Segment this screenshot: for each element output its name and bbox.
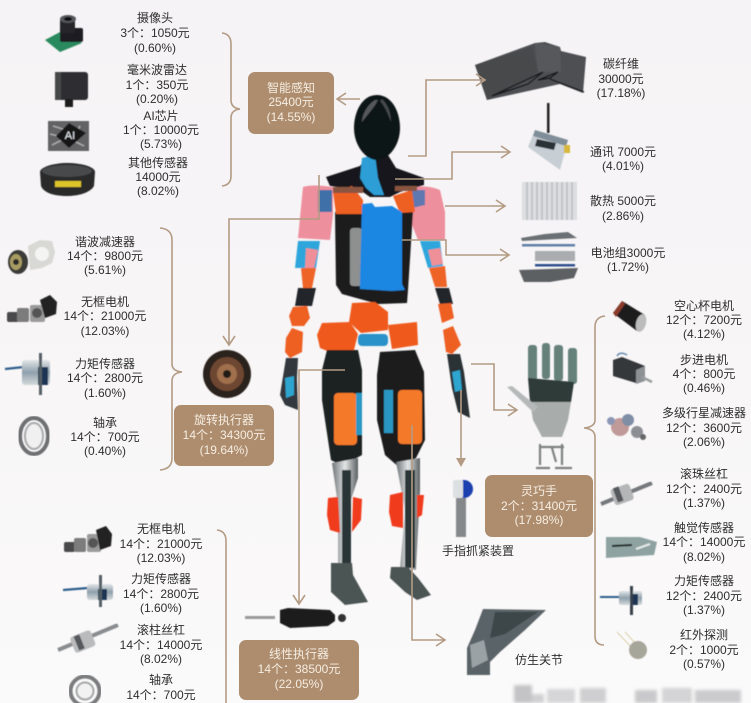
label: linear torque sensor: (1.60%)	[140, 601, 182, 615]
icon: camera	[45, 15, 83, 52]
label: bearing: (0.40%)	[84, 444, 126, 458]
icon: finger grip	[453, 480, 473, 537]
label: roller screw: 滚柱丝杠	[137, 622, 185, 637]
label: coreless motor: 空心杯电机	[674, 299, 734, 313]
label: bearing: 14个：700元	[70, 430, 140, 444]
icon: hand torque sensor	[600, 586, 642, 615]
icon: bearing	[20, 418, 48, 454]
icon: harmonic reducer	[8, 240, 55, 274]
label: mm-wave radar: 1个：350元	[126, 78, 188, 92]
arrow: to rotary actuator	[223, 175, 319, 345]
label: harmonic reducer: (5.61%)	[84, 263, 126, 277]
label: linear frameless motor: 无框电机	[137, 522, 185, 536]
left shin	[332, 458, 358, 565]
label: AI chip: (5.73%)	[140, 137, 182, 151]
icon: stepper motor	[613, 353, 652, 384]
icon: heat sink	[522, 182, 577, 220]
icon: linear torque sensor	[63, 575, 113, 607]
icon: frameless motor	[7, 295, 57, 322]
icon: roller screw	[58, 625, 118, 654]
label: bionic joint: 仿生关节	[515, 653, 563, 667]
panel: linear actuator: 14个：38500元	[258, 662, 340, 676]
label: roller screw: (8.02%)	[140, 652, 182, 666]
label: frameless motor: (12.03%)	[81, 324, 129, 338]
label: bearing: 轴承	[93, 415, 117, 430]
right thigh	[377, 350, 425, 468]
label: frameless motor: 无框电机	[81, 295, 129, 309]
label: coreless motor: (4.12%)	[683, 327, 725, 341]
label: carbon fibre: (17.18%)	[597, 86, 645, 100]
panel: perception: (14.55%)	[267, 110, 315, 124]
icon: dexterous hand	[507, 343, 577, 468]
label: battery: (1.72%)	[607, 260, 649, 274]
panel: dexterous hand	[485, 475, 593, 537]
label: coreless motor: 12个：7200元	[666, 313, 742, 327]
label: hand torque sensor: (1.37%)	[683, 603, 725, 617]
label: mm-wave radar: 毫米波雷达	[127, 62, 187, 77]
label: harmonic reducer: 14个：9800元	[67, 249, 143, 263]
icon: bionic joint	[467, 609, 546, 675]
label: hand torque sensor: 12个：2400元	[666, 589, 742, 603]
head	[354, 95, 400, 160]
label: camera: (0.60%)	[134, 41, 176, 55]
label: infrared sensor: 红外探测	[680, 627, 728, 642]
icon: rotary actuator	[203, 350, 251, 398]
label: linear frameless motor: (12.03%)	[137, 551, 185, 565]
label: ball screw: (1.37%)	[683, 496, 725, 510]
brace: linear actuator parts	[217, 530, 226, 703]
label: linear torque sensor: 力矩传感器	[131, 571, 191, 586]
label: torque sensor: 14个：2800元	[67, 371, 143, 385]
icon: radar	[55, 72, 88, 107]
icon: linear frameless motor	[64, 526, 112, 552]
panel: dexterous hand: (17.98%)	[515, 513, 563, 527]
icon: communications module	[528, 103, 570, 170]
panel: perception: 25400元	[268, 95, 314, 109]
arrow: to finger grip	[456, 390, 466, 467]
label: camera: 摄像头	[137, 10, 173, 25]
arrow: to carbon fibre	[408, 74, 485, 156]
brace: perception parts	[222, 33, 240, 186]
shoulders	[326, 155, 424, 197]
panel: linear actuator: 线性执行器	[269, 647, 329, 661]
label: tactile sensor: 触觉传感器	[674, 520, 734, 535]
robot figure	[280, 95, 470, 605]
left thigh	[322, 350, 362, 466]
label: planetary reducer: 多级行星减速器	[662, 406, 746, 420]
label: other sensors: 其他传感器	[128, 155, 188, 170]
hip right	[388, 322, 418, 349]
label: linear bearing: 轴承	[149, 672, 173, 687]
label: torque sensor: 力矩传感器	[75, 356, 135, 371]
label: torque sensor: (1.60%)	[84, 386, 126, 400]
panel: perception	[248, 72, 334, 134]
panel: rotary actuator: 14个：34300元	[183, 428, 265, 442]
label: ball screw: 滚珠丝杠	[680, 466, 728, 481]
arrow: to battery	[402, 240, 509, 261]
brace: rotary actuator parts	[160, 228, 182, 470]
label: harmonic reducer: 谐波减速器	[75, 235, 135, 249]
label: stepper motor: 步进电机	[680, 353, 728, 367]
icon: carbon fibre sheets	[475, 42, 586, 100]
icon: torque sensor	[5, 353, 50, 395]
label: linear frameless motor: 14个：21000元	[120, 537, 202, 551]
label: communications: 通讯 7000元	[590, 145, 656, 159]
label: stepper motor: 4个：800元	[673, 367, 735, 381]
label: other sensors: 14000元	[135, 170, 181, 184]
chest actuators	[333, 186, 363, 214]
panel: rotary actuator: (19.64%)	[200, 443, 248, 457]
label: finger grip: 手指抓紧装置	[442, 543, 514, 558]
label: infrared sensor: (0.57%)	[683, 657, 725, 671]
label: linear torque sensor: 14个：2800元	[123, 587, 199, 601]
label: tactile sensor: (8.02%)	[683, 550, 725, 564]
arrow: to bionic joint	[412, 425, 445, 646]
label: cooling: (2.86%)	[602, 209, 644, 223]
brace: dexterous hand parts	[584, 316, 605, 645]
icon: AI chip	[48, 121, 89, 151]
panel: rotary actuator	[174, 405, 274, 466]
arrow: head to perception	[337, 93, 360, 105]
label: stepper motor: (0.46%)	[683, 381, 725, 395]
label: AI chip: AI芯片	[143, 109, 179, 123]
label: tactile sensor: 14个：14000元	[663, 535, 745, 549]
right shin	[396, 458, 420, 570]
label: ball screw: 12个：2400元	[666, 482, 742, 496]
icon: planetary reducer	[607, 414, 646, 440]
label: carbon fibre: 30000元	[598, 72, 644, 86]
neck	[360, 155, 384, 195]
label: hand torque sensor: 力矩传感器	[674, 573, 734, 588]
label: infrared sensor: 2个：1000元	[669, 643, 739, 657]
panel: linear actuator: (22.05%)	[275, 677, 323, 691]
icon: other sensor	[40, 163, 95, 196]
icon: linear bearing	[70, 676, 100, 703]
arrow: to communications	[395, 146, 510, 179]
right arm	[408, 186, 470, 418]
label: roller screw: 14个：14000元	[120, 638, 202, 652]
watermark	[514, 685, 741, 703]
label: camera: 3个：1050元	[120, 26, 190, 40]
icon: linear actuator	[245, 608, 346, 628]
label: AI chip: 1个：10000元	[123, 123, 199, 137]
label: cooling: 散热 5000元	[590, 193, 656, 208]
label: mm-wave radar: (0.20%)	[136, 92, 178, 106]
panel: dexterous hand: 2个：31400元	[501, 499, 577, 513]
pelvis	[349, 302, 388, 333]
head highlight	[380, 99, 391, 122]
battery pack	[360, 203, 405, 291]
panel: rotary actuator: 旋转执行器	[194, 412, 254, 427]
arrow: to hand	[471, 364, 517, 416]
label: planetary reducer: (2.06%)	[683, 435, 725, 449]
label: frameless motor: 14个：21000元	[64, 309, 146, 323]
label: battery: 电池组3000元	[591, 246, 665, 260]
icon: ball screw	[601, 483, 652, 506]
label: carbon fibre: 碳纤维	[603, 57, 639, 71]
icon: tactile sensor	[606, 537, 657, 558]
label: other sensors: (8.02%)	[137, 184, 179, 198]
icon: battery parts	[519, 232, 578, 282]
panel: perception: 智能感知	[267, 80, 315, 95]
panel: linear actuator	[239, 640, 359, 700]
calf actuators	[327, 497, 340, 533]
hip left	[317, 322, 358, 353]
label: planetary reducer: 12个：3600元	[666, 421, 742, 435]
torso side detail	[350, 228, 362, 286]
left arm	[280, 186, 333, 410]
label: communications: (4.01%)	[602, 159, 644, 173]
icon: coreless motor	[613, 301, 648, 333]
feet	[331, 563, 368, 605]
icon: AI chip: AI	[65, 130, 75, 142]
arrow: to cooling	[445, 200, 505, 212]
label: linear bearing: 14个：700元	[126, 688, 196, 702]
icon: infrared sensor	[617, 632, 647, 659]
torso	[335, 212, 413, 304]
arrow: to linear actuator	[293, 370, 345, 604]
panel: dexterous hand: 灵巧手	[521, 484, 557, 498]
